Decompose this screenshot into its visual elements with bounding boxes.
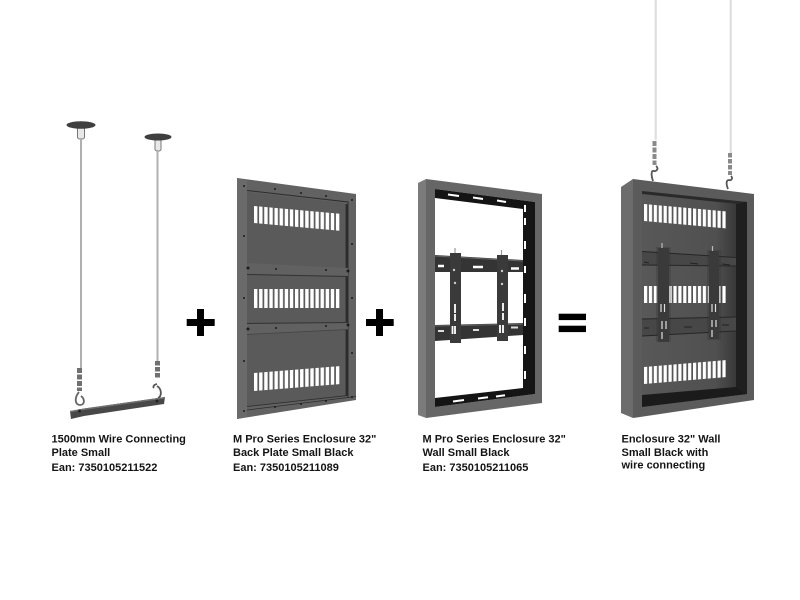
enclosure interior: [642, 191, 747, 407]
upper rail: [642, 251, 736, 266]
caption: assembled enclosure: Enclosure 32" Wall: [622, 434, 720, 446]
bracket left: [450, 248, 461, 343]
vent slots bottom: [254, 366, 341, 391]
equals sign: [559, 314, 586, 332]
upper rail: [435, 255, 523, 272]
plate body: [237, 178, 356, 419]
plus sign 2: [366, 309, 394, 336]
lower rail: [435, 323, 523, 341]
interior bottom band: [642, 387, 747, 407]
product: assembled enclosure with wires: [621, 0, 754, 418]
panel edge lines: [247, 190, 356, 410]
icon: chains and hooks: [652, 141, 732, 189]
screw holes: [243, 185, 353, 412]
caption: wall enclosure: M Pro Series Enclosure 32": [422, 434, 566, 446]
caption: wire connecting plate: Ean: 7350105211522: [52, 462, 157, 474]
caption: wire connecting plate: 1500mm Wire Connecting: [52, 434, 186, 446]
product: wall enclosure frame: [418, 179, 542, 418]
frame left side: [418, 179, 426, 418]
icon: turnbuckle chains and hooks: [76, 361, 161, 405]
caption: back plate: Back Plate Small Black: [233, 447, 354, 459]
bracket right: [707, 246, 721, 340]
product: wire connecting plate: [66, 121, 172, 419]
caption: wall enclosure: Wall Small Black: [422, 447, 510, 459]
enclosure left side: [621, 179, 633, 418]
lower rail: [642, 317, 736, 336]
vent slots top: [254, 206, 341, 231]
caption: back plate: Ean: 7350105211089: [233, 462, 339, 474]
left strip: [237, 178, 247, 419]
caption: assembled enclosure: wire connecting: [620, 460, 705, 472]
caption: wire connecting plate: Plate Small: [52, 447, 110, 459]
vent slots bottom: [644, 360, 727, 384]
plus sign 1: [187, 309, 215, 336]
inner black band right: [523, 202, 535, 394]
icon: ceiling plate left: [66, 121, 96, 139]
inner black band top: [435, 189, 535, 209]
band slots: [448, 194, 525, 402]
connecting plate bar: [70, 397, 165, 419]
wires: [81, 139, 158, 368]
bracket left: [656, 243, 671, 342]
caption: assembled enclosure: Small Black with: [622, 447, 709, 459]
vent slots middle: [254, 289, 341, 308]
icon: ceiling plate right: [144, 134, 172, 151]
vent slots top: [644, 204, 727, 229]
vent slots middle: [644, 286, 727, 303]
inner black band bottom: [435, 388, 535, 407]
ribs: [247, 263, 348, 334]
product: back plate: [237, 178, 356, 419]
inner panel: [247, 192, 345, 407]
interior right wall: [736, 202, 747, 394]
frame outer with opening: [426, 179, 542, 418]
suspension wires: [656, 0, 731, 153]
interior top shadow: [642, 191, 747, 205]
caption: wall enclosure: Ean: 7350105211065: [422, 462, 528, 474]
bracket right: [497, 250, 508, 341]
caption: back plate: M Pro Series Enclosure 32": [233, 434, 376, 446]
enclosure front frame: [633, 179, 754, 418]
